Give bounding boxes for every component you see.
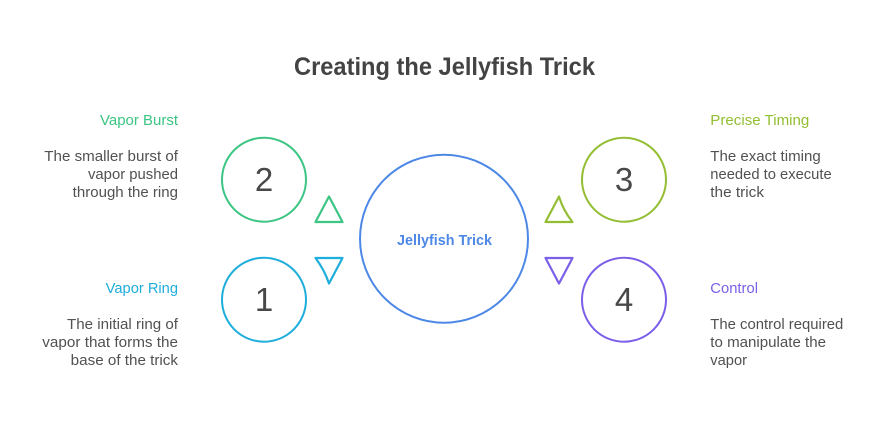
heading: Control: Control bbox=[710, 281, 758, 297]
number circle 4: 4 bbox=[615, 281, 633, 318]
text block: Precise Timing description: The exact timing bbox=[710, 149, 821, 165]
heading: Vapor Ring: Vapor Ring bbox=[106, 281, 178, 297]
title: Creating the Jellyfish Trick bbox=[294, 53, 595, 81]
arrow: purple triangle down bbox=[546, 258, 572, 284]
text block: Control description: The control required bbox=[710, 317, 843, 333]
text block: Control description: vapor bbox=[710, 353, 747, 369]
text block: Vapor Burst description: through the ring bbox=[73, 185, 178, 201]
text block: Control description bbox=[710, 317, 843, 369]
text block: Precise Timing description: needed to execute bbox=[710, 167, 832, 183]
heading: Vapor Burst: Vapor Burst bbox=[100, 113, 178, 129]
text block: Vapor Ring description: vapor that forms the bbox=[42, 335, 178, 351]
text block: Vapor Burst description: The smaller burst of bbox=[44, 149, 179, 165]
panel: step 3 Precise Timing bbox=[546, 113, 832, 222]
number circle 1 bbox=[222, 258, 306, 342]
central node: Jellyfish Trick: Jellyfish Trick bbox=[397, 233, 493, 249]
arrow: green triangle up bbox=[316, 196, 342, 222]
number circle 1: 1 bbox=[255, 281, 273, 318]
text block: Vapor Ring description: base of the trick bbox=[71, 353, 179, 369]
panel: step 2 Vapor Burst bbox=[44, 113, 343, 222]
heading: Precise Timing: Precise Timing bbox=[710, 113, 809, 129]
arrow: blue triangle down bbox=[316, 258, 342, 284]
central node: Jellyfish Trick bbox=[360, 155, 528, 323]
arrow: olive triangle up bbox=[546, 196, 572, 222]
text block: Precise Timing description bbox=[710, 149, 832, 201]
text block: Vapor Burst description: vapor pushed bbox=[88, 167, 178, 183]
panel: step 4 Control bbox=[546, 258, 843, 369]
text block: Control description: to manipulate the bbox=[710, 335, 826, 351]
text block: Vapor Burst description bbox=[44, 149, 179, 201]
panel: step 1 Vapor Ring bbox=[42, 258, 343, 369]
number circle 2: 2 bbox=[255, 161, 273, 198]
text block: Vapor Ring description: The initial ring of bbox=[67, 317, 179, 333]
text block: Vapor Ring description bbox=[42, 317, 179, 369]
number circle 3 bbox=[582, 138, 666, 222]
number circle 2 bbox=[222, 138, 306, 222]
number circle 3: 3 bbox=[615, 161, 633, 198]
text block: Precise Timing description: the trick bbox=[710, 185, 765, 201]
number circle 4 bbox=[582, 258, 666, 342]
